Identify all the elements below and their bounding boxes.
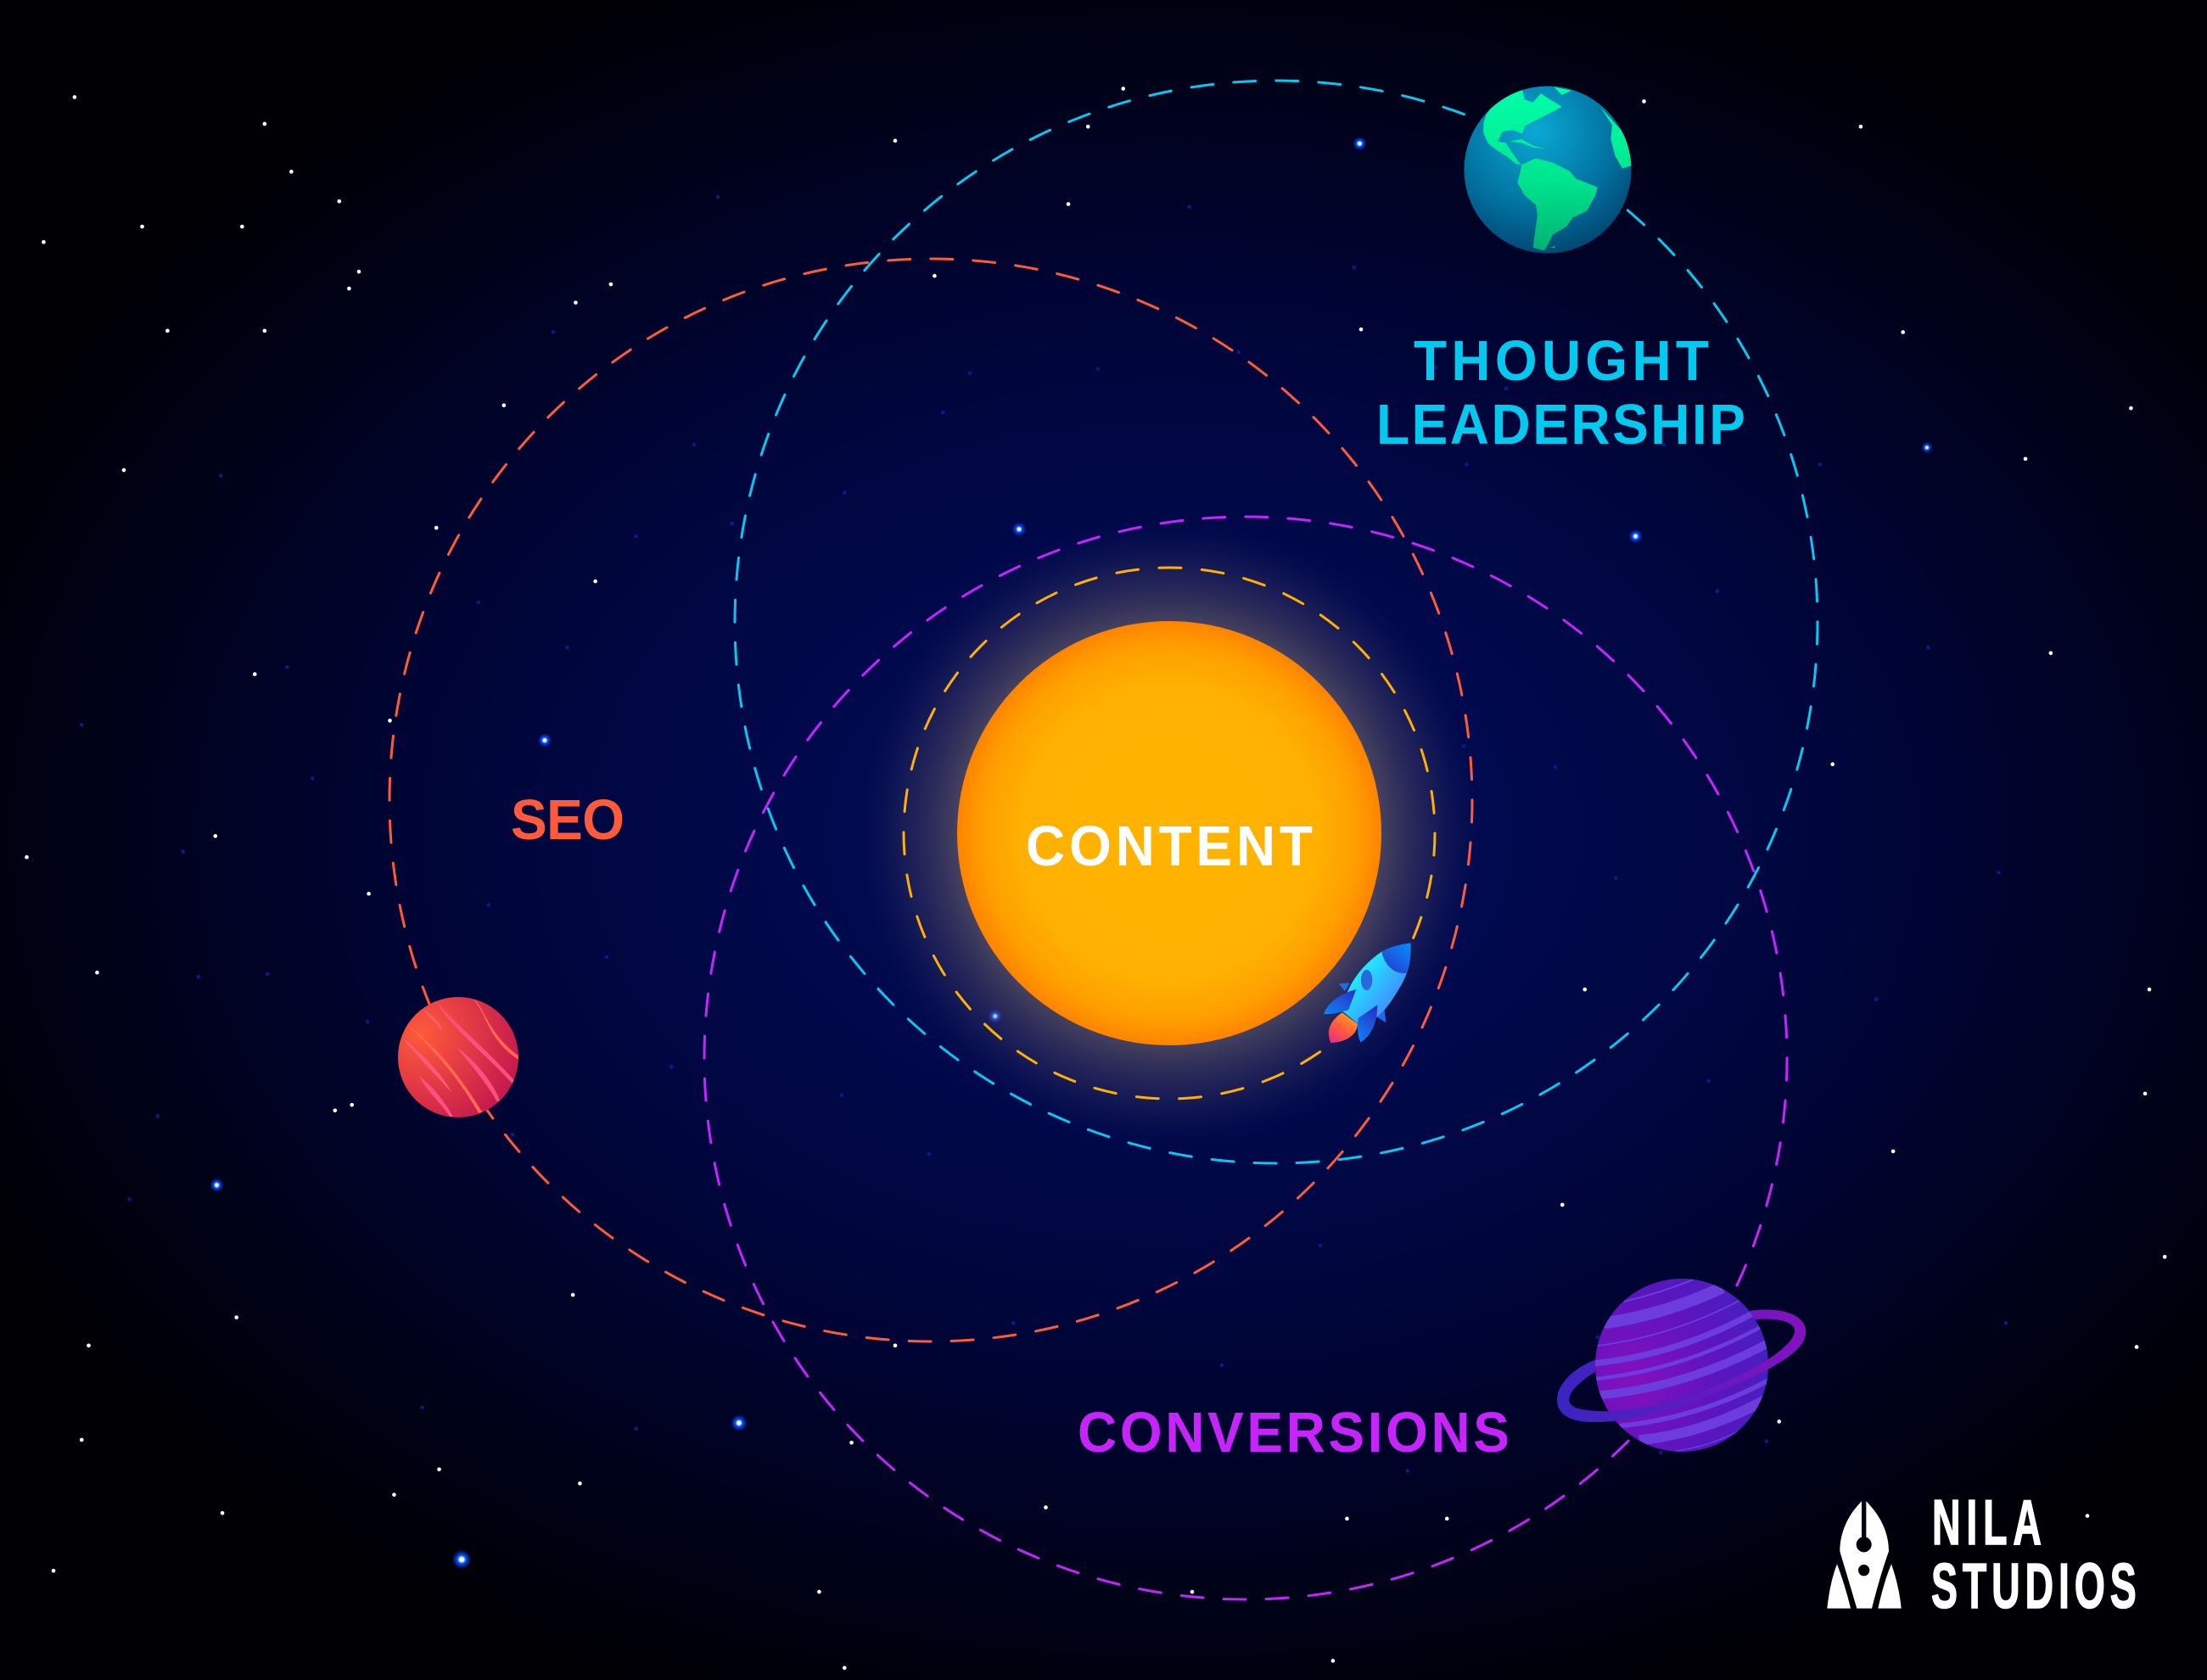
icon: saturn <box>1557 1279 1806 1452</box>
logo: Nila Studios <box>1827 1488 2137 1622</box>
logo mark: pen nib rocket <box>1827 1501 1902 1609</box>
logo text: STUDIOS: STUDIOS <box>1931 1552 2137 1622</box>
sun glow <box>855 519 1483 1147</box>
orbit: content <box>904 568 1435 1099</box>
orbit: SEO <box>389 259 1472 1341</box>
label: thought leadership <box>1376 329 1745 456</box>
icon: rocket <box>1324 944 1411 1043</box>
orbit: thought leadership <box>735 81 1818 1163</box>
icon: red planet <box>398 997 518 1117</box>
label: conversions: CONVERSIONS <box>1078 1401 1510 1464</box>
orbit: conversions <box>704 517 1787 1599</box>
faint stars <box>80 195 2008 1473</box>
logo text: NILA: NILA <box>1932 1488 2042 1559</box>
label: thought leadership: LEADERSHIP <box>1376 393 1745 456</box>
blue glowing stars <box>210 137 1933 1570</box>
label: content: CONTENT <box>1026 815 1313 877</box>
label: thought leadership: THOUGHT <box>1414 329 1709 392</box>
icon: earth <box>1465 87 1632 253</box>
label: SEO: SEO <box>511 788 625 851</box>
sun <box>957 621 1381 1045</box>
